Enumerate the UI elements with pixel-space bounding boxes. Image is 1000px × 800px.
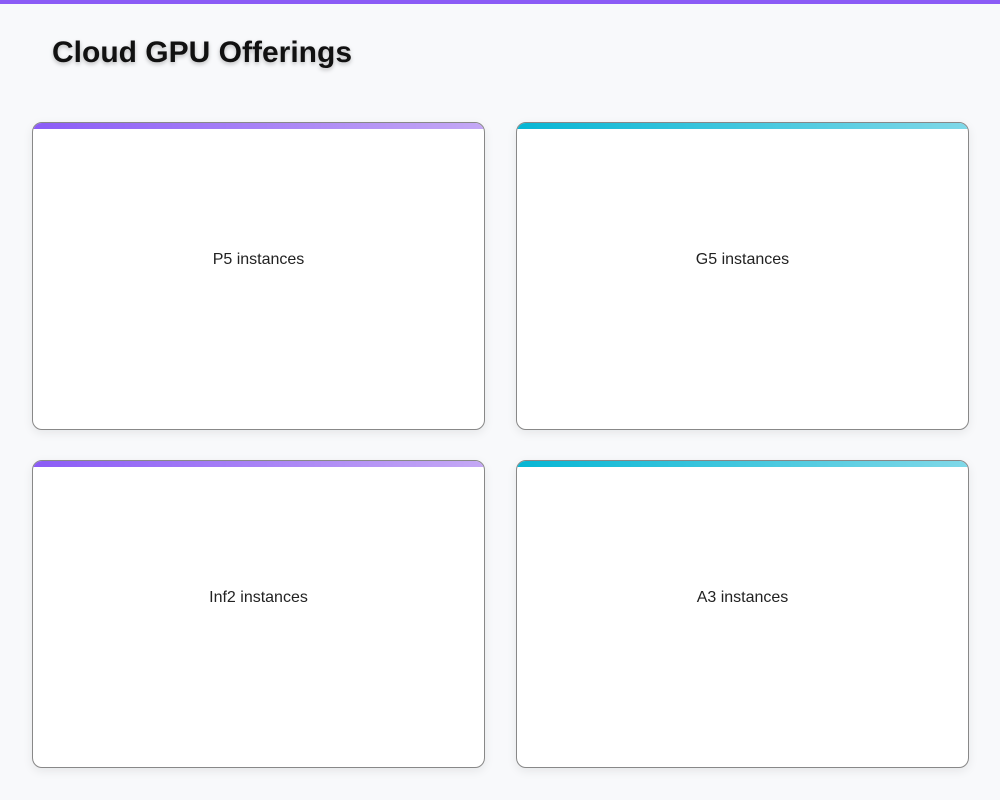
title: Cloud GPU Offerings (52, 36, 352, 69)
panel: P5 instances: P5 instances (213, 251, 304, 268)
panel: G5 instances: G5 instances (696, 251, 789, 268)
panel: A3 instances: A3 instances (697, 589, 788, 606)
panel: Inf2 instances: Inf2 instances (209, 589, 308, 606)
panel: Inf2 instances (32, 460, 485, 768)
panel: P5 instances (32, 122, 485, 430)
panel: A3 instances (516, 460, 969, 768)
panel: G5 instances (516, 122, 969, 430)
